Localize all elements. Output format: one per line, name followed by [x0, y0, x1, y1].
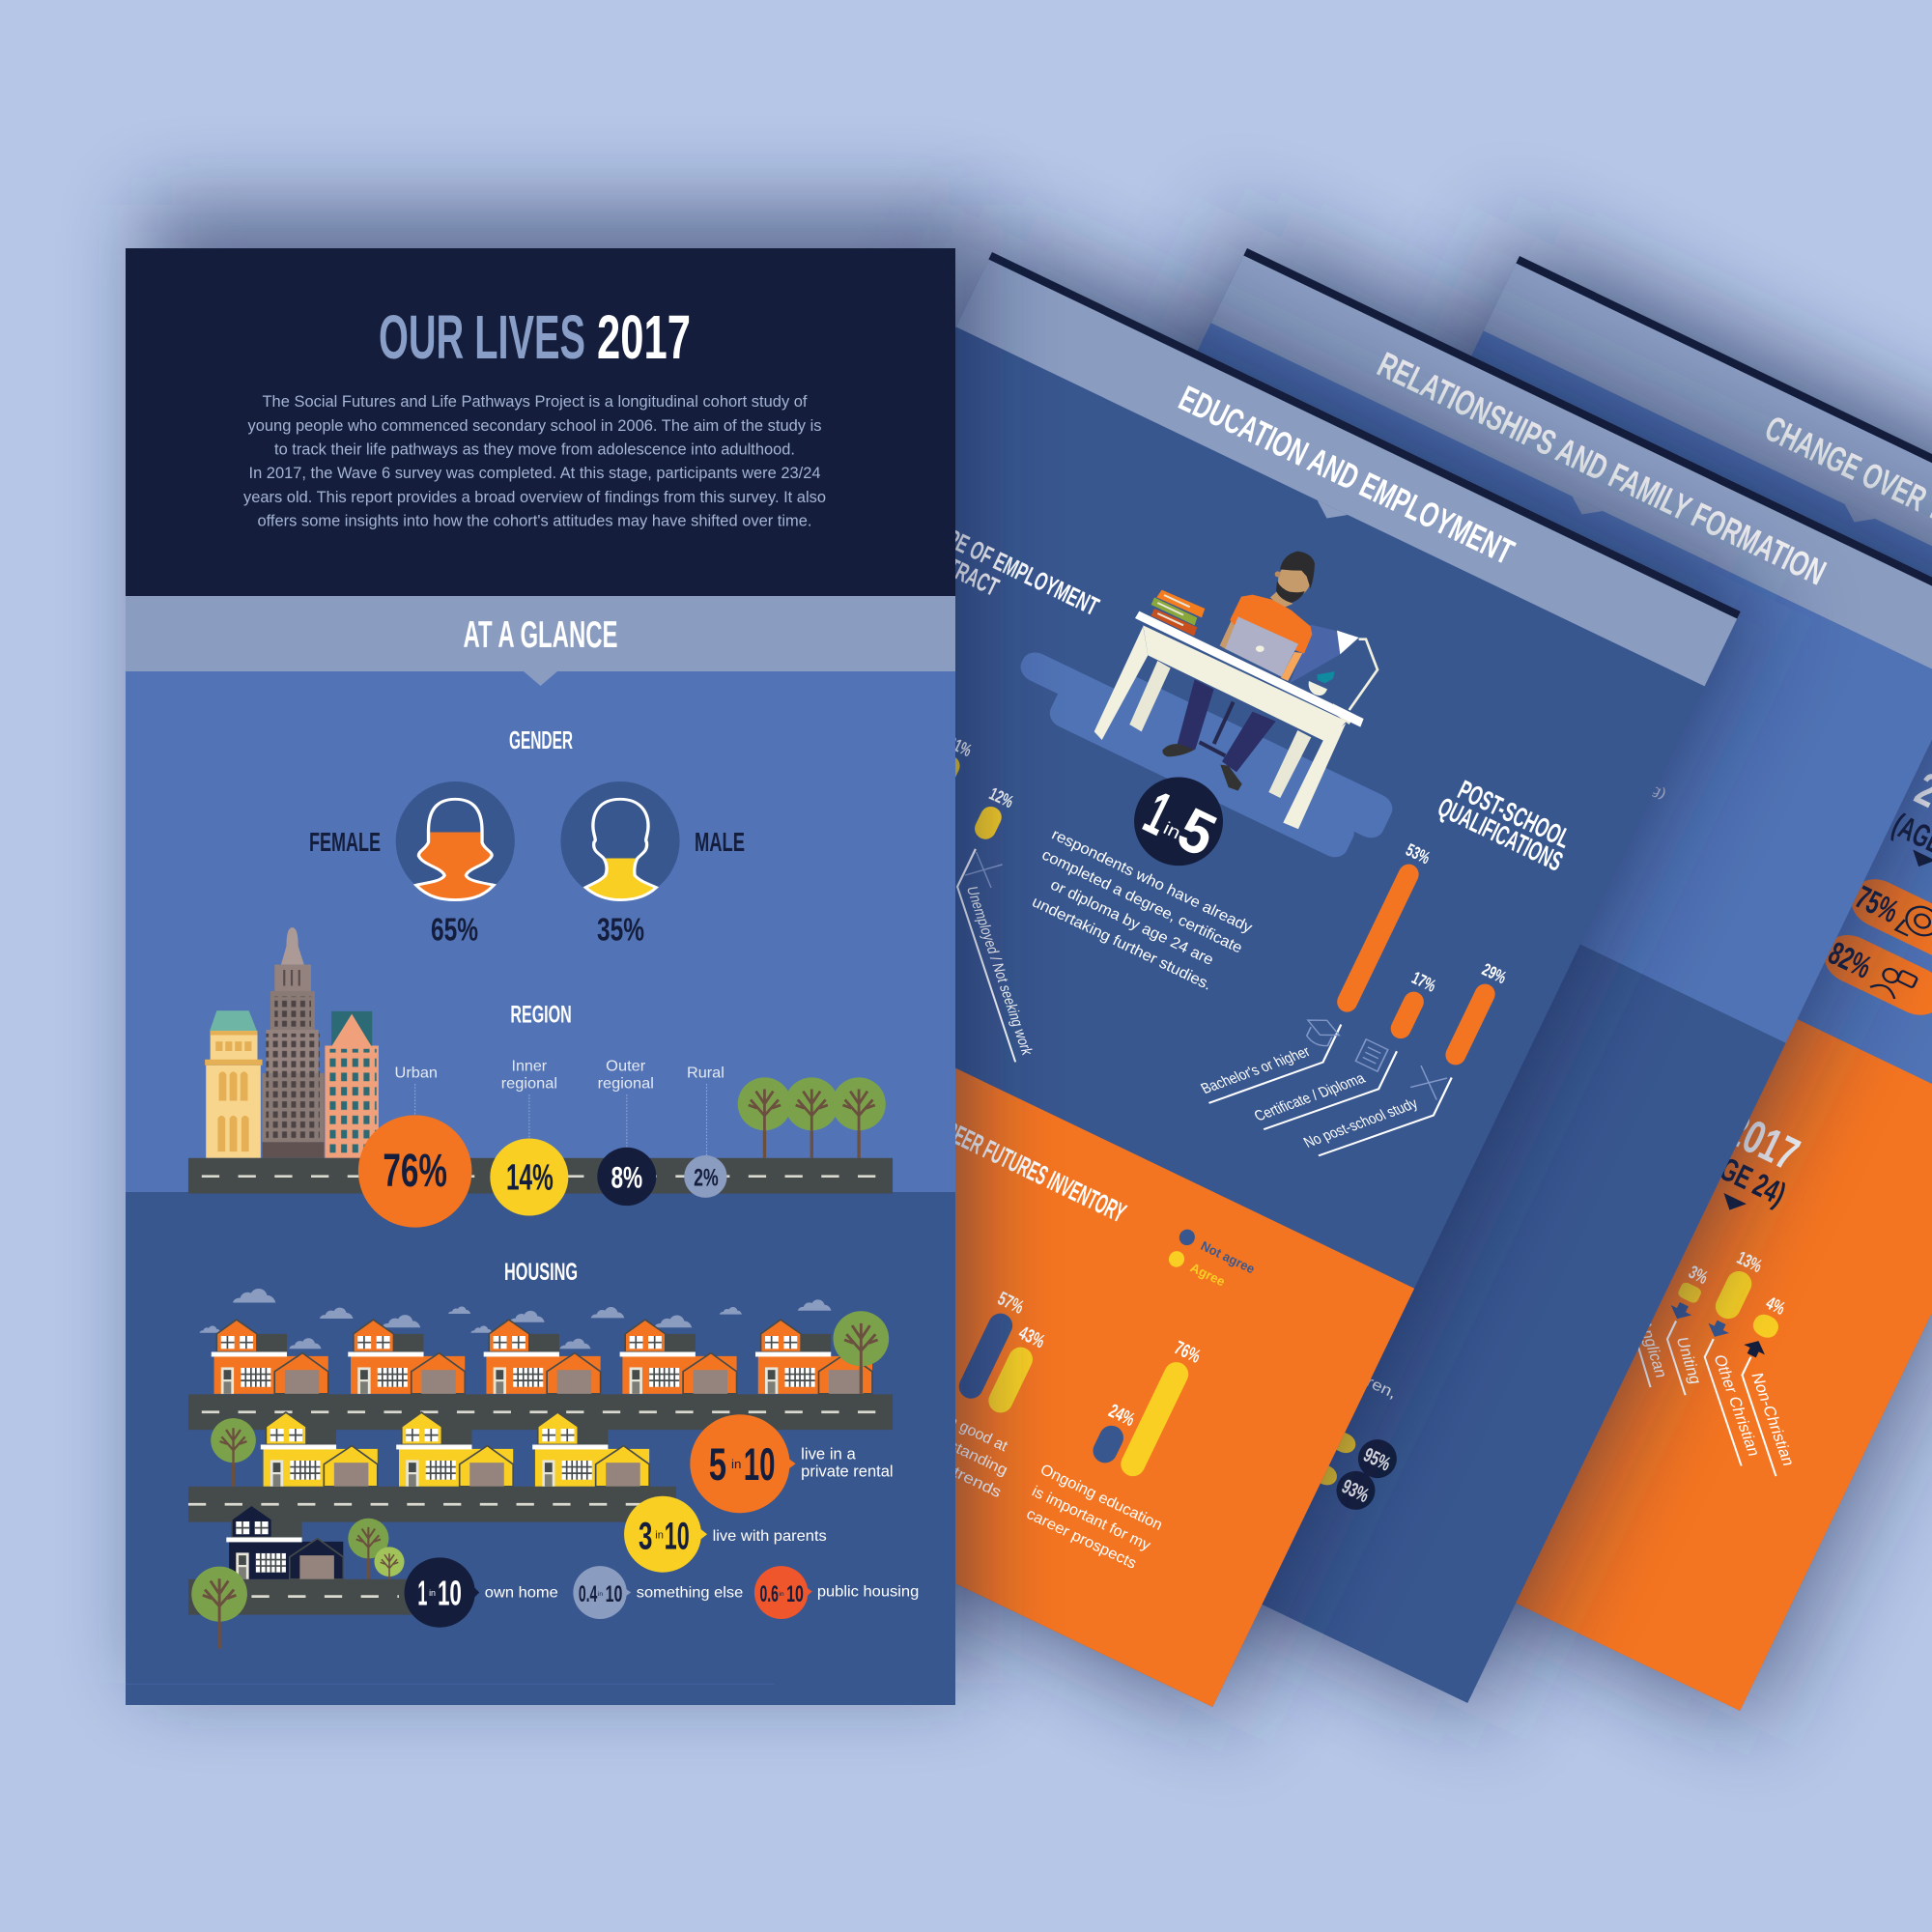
- page: change over time: 4%: [1763, 1293, 1788, 1320]
- stat: rural 2%: [684, 1155, 727, 1198]
- female label: FEMALE: [309, 827, 381, 857]
- page: relationships and family formation: children,: [1329, 1356, 1400, 1402]
- icon: trees: [738, 1077, 886, 1158]
- page: education and employment: [452, 226, 1760, 1719]
- qualification bars: [1331, 840, 1542, 1069]
- career bars: 43%: [1015, 1321, 1048, 1352]
- icon: buildings: [205, 927, 379, 1158]
- heading: housing: HOUSING: [504, 1259, 578, 1286]
- 1 in 5 badge: [1120, 762, 1237, 881]
- stat: 3 in 10: 3: [639, 1516, 652, 1558]
- employment bars: 21%: [945, 733, 975, 761]
- intro text: young people who commenced secondary school in 2006. The aim of the study is: [247, 417, 821, 435]
- 1 in 5 paragraph: or diploma by age 24 are: [1048, 875, 1216, 969]
- region labels: Rural: [687, 1065, 724, 1081]
- icon: male head: [560, 781, 680, 900]
- qualification bars: 29%: [1479, 960, 1509, 988]
- 1 in 5 badge: 5: [1168, 794, 1226, 869]
- page: education and employment: No post-school study: [1301, 1095, 1421, 1151]
- stat: 0.6 in 10: in: [779, 1591, 784, 1598]
- page shadow: [145, 205, 976, 1683]
- 1 in 5 paragraph: completed a degree, certificate: [1039, 845, 1245, 956]
- 1 in 5 paragraph: respondents who have already: [1049, 825, 1256, 936]
- career bar captions: I am good at: [926, 1403, 1010, 1455]
- legend: Agree: [1188, 1261, 1227, 1290]
- qualification labels: [1208, 987, 1452, 1193]
- page: change over time: 2017: [1719, 1102, 1806, 1180]
- region labels: Inner: [512, 1058, 547, 1074]
- career bars: [953, 1258, 1205, 1481]
- stat: 0.4 in 10: 10: [606, 1581, 622, 1607]
- career bars: 24%: [1105, 1400, 1139, 1431]
- label: public housing: public housing: [817, 1583, 919, 1600]
- page: change over time: Uniting: [1672, 1336, 1706, 1385]
- stat: inner regional 14%: 14%: [506, 1157, 554, 1199]
- employment bars: [836, 733, 1146, 1068]
- qualification bars: 17%: [1408, 969, 1438, 996]
- clouds: [200, 1289, 831, 1349]
- career bar captions: [892, 1396, 1167, 1575]
- page: change over time: Non-Christian: [1747, 1372, 1799, 1467]
- page: change over time: Anglican: [1634, 1319, 1671, 1378]
- stat: 5 in 10: 5: [709, 1439, 726, 1491]
- career bar captions: is important for my: [1030, 1482, 1153, 1554]
- page: relationships and family formation: 95%: [1360, 1443, 1395, 1475]
- label: private rental: private rental: [801, 1463, 894, 1480]
- region and housing content: [126, 927, 919, 1685]
- stat: 0.6 in 10: 10: [786, 1581, 804, 1607]
- career bar captions: understanding: [907, 1417, 1010, 1479]
- road: row 2: [188, 1487, 676, 1522]
- intro text: The Social Futures and Life Pathways Project is a longitudinal cohort study of: [263, 393, 808, 411]
- stat: inner regional 14%: [490, 1138, 568, 1216]
- intro text: to track their life pathways as they move from adolescence into adulthood.: [274, 440, 795, 458]
- illustration: person at desk: [1094, 552, 1378, 829]
- intro text: years old. This report provides a broad overview of findings from this survey. It also: [243, 489, 826, 506]
- page: education and employment: CAREER FUTURES INVENTORY: [921, 1106, 1131, 1229]
- stat: 0.6 in 10: [754, 1566, 812, 1619]
- qualification icons: [1300, 1013, 1447, 1101]
- title: 2017: [597, 302, 691, 372]
- 1 in 5 paragraph: [1019, 825, 1256, 999]
- stat: 0.6 in 10: 0.6: [759, 1581, 779, 1607]
- legend: [1166, 1227, 1258, 1298]
- stat: urban 76%: 76%: [383, 1145, 447, 1197]
- stat: urban 76%: [358, 1115, 471, 1228]
- page: education and employment: Certificate / Diploma: [1252, 1070, 1369, 1124]
- page: education and employment: Bachelor's or higher: [1198, 1044, 1313, 1097]
- label: own home: own home: [485, 1585, 558, 1601]
- page: relationships and family formation: g): [1649, 781, 1668, 802]
- label: something else: something else: [637, 1585, 743, 1601]
- stat: 5 in 10: [690, 1414, 796, 1513]
- label: private rental: [801, 1444, 894, 1480]
- type of employment heading: TYPE OF EMPLOYMENT: [923, 515, 1103, 621]
- type of employment heading: CONTRACT: [911, 538, 1003, 602]
- stat: rural 2%: 2%: [694, 1164, 719, 1191]
- post-school heading: POST-SCHOOL: [1453, 775, 1576, 854]
- stat: 0.4 in 10: 0.4: [579, 1581, 598, 1607]
- region labels: regional: [501, 1075, 557, 1092]
- page: change over time: 3%: [1686, 1263, 1711, 1289]
- career bar captions: Ongoing education: [1037, 1461, 1165, 1534]
- 1 in 5 badge: in: [1160, 819, 1183, 843]
- type of employment heading: [911, 515, 1103, 644]
- stat: 5 in 10: in: [731, 1457, 741, 1471]
- intro text: offers some insights into how the cohort's attitudes may have shifted over time.: [257, 512, 811, 529]
- icon: tree row 2: [211, 1418, 256, 1487]
- road: row 3: [188, 1579, 413, 1615]
- heading: region: REGION: [510, 1001, 572, 1028]
- page: change over time: Other Christian: [1710, 1353, 1764, 1458]
- region labels: Urban: [395, 1065, 438, 1081]
- icon: female head: [396, 781, 515, 900]
- stat: 1 in 10: [405, 1557, 479, 1628]
- navy house: [226, 1505, 343, 1579]
- intro text: In 2017, the Wave 6 survey was completed. At this stage, participants were 23/24: [249, 465, 821, 482]
- panel: at a glance: [126, 248, 955, 1705]
- post-school heading: [1434, 770, 1577, 877]
- orange houses: [212, 1320, 872, 1394]
- road: region: [188, 1158, 893, 1194]
- page: relationships and family formation: [707, 222, 1932, 1715]
- stat: 1 in 10: 10: [438, 1574, 462, 1613]
- page: relationships and family formation: 93%: [1339, 1474, 1373, 1507]
- road: row 1: [188, 1394, 893, 1430]
- stat: 3 in 10: in: [655, 1530, 664, 1542]
- stat: 1 in 10: in: [429, 1588, 436, 1598]
- career bar captions: current trends: [895, 1435, 1005, 1501]
- page: change over time: 13%: [1734, 1248, 1765, 1277]
- icon: tree row 1: [833, 1311, 889, 1394]
- stat: 1 in 10: 1: [417, 1574, 427, 1613]
- stat: outer regional 8%: 8%: [611, 1160, 642, 1194]
- heading: gender: GENDER: [509, 725, 573, 754]
- region labels: [395, 1058, 724, 1092]
- stat: 3 in 10: 10: [665, 1516, 690, 1558]
- region labels: regional: [598, 1075, 654, 1092]
- icon: tree foreground: [191, 1567, 247, 1649]
- stat: 0.4 in 10: in: [598, 1591, 603, 1598]
- page: change over time: [980, 230, 1932, 1722]
- yellow houses: [261, 1412, 649, 1487]
- employment bars: 12%: [986, 784, 1016, 812]
- career bar captions: career prospects: [1024, 1504, 1140, 1572]
- male percent: 35%: [597, 912, 644, 947]
- label: private rental: live in a: [801, 1444, 857, 1463]
- label: live with parents: live with parents: [713, 1528, 827, 1545]
- career bars: 76%: [1171, 1336, 1205, 1368]
- post-school heading: QUALIFICATIONS: [1434, 791, 1568, 877]
- 1 in 5 badge: 1: [1134, 779, 1181, 848]
- stat: outer regional 8%: [597, 1148, 656, 1206]
- heading: at a glance: AT A GLANCE: [464, 614, 618, 656]
- intro text: [243, 393, 826, 529]
- male label: MALE: [695, 827, 745, 857]
- 1 in 5 paragraph: undertaking further studies.: [1030, 893, 1214, 993]
- stat: 3 in 10: [624, 1496, 707, 1573]
- page: change over time: (AGE 24): [1693, 1141, 1791, 1212]
- title: OUR LIVES: [379, 302, 585, 372]
- stat: 0.4 in 10: [573, 1566, 631, 1619]
- region labels: Outer: [606, 1058, 645, 1074]
- icon: trees row 3: [348, 1519, 405, 1579]
- qualification bars: 53%: [1403, 840, 1433, 868]
- employment bars: Unemployed / Not seeking work: [963, 886, 1036, 1056]
- page: education and employment: EDUCATION AND EMPLOYMENT: [1173, 378, 1520, 572]
- page: change over time: 82%: [1823, 935, 1877, 985]
- floor shape: [1004, 630, 1397, 872]
- legend: Not agree: [1198, 1239, 1257, 1277]
- career bars: 57%: [994, 1287, 1028, 1319]
- stat: 5 in 10: 10: [744, 1439, 776, 1491]
- female percent: 65%: [431, 912, 478, 947]
